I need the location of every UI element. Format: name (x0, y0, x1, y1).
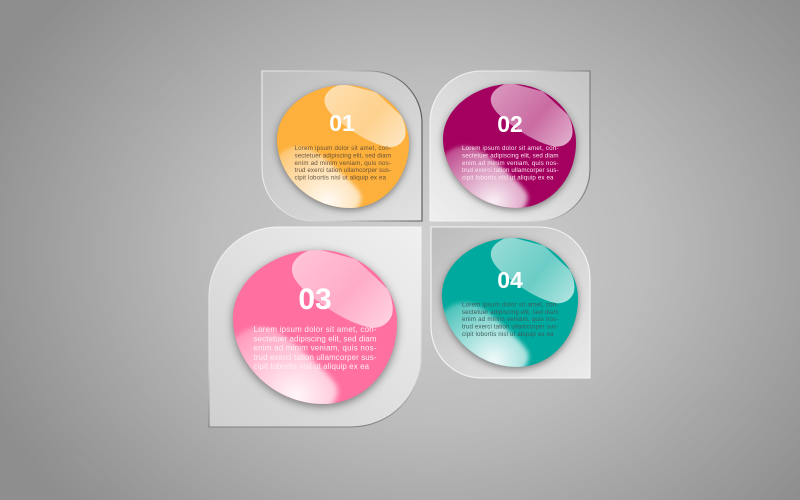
text block 2: enim ad minim veniam, quis nos- (462, 160, 558, 167)
text block 3: enim ad minim veniam, quis nos- (254, 344, 377, 353)
blob: teal (438, 237, 578, 371)
text block 4: cipit lobortis nisl ut aliquip ex ea (462, 331, 554, 338)
panel 1 (262, 71, 422, 221)
text block 2: trud exerci tation ullamcorper sus- (462, 167, 558, 174)
text block 2: cipit lobortis nisl ut aliquip ex ea (462, 175, 554, 182)
text block 3: Lorem ipsum dolor sit amet, con- (254, 325, 377, 334)
blob: pink (228, 248, 397, 409)
number 03: 03 (298, 283, 332, 316)
text block 1 (294, 145, 391, 182)
text block 4 (462, 301, 558, 338)
number 04: 04 (497, 267, 523, 293)
text block 4: trud exerci tation ullamcorper sus- (462, 324, 558, 331)
panel 3 (209, 227, 421, 427)
number 02: 02 (497, 111, 523, 137)
panel 2 (430, 71, 590, 221)
text block 3: sectetuer adipiscing elit, sed diam (254, 334, 377, 343)
text block 1: enim ad minim veniam, quis nos- (294, 160, 391, 167)
blob: magenta (439, 83, 576, 212)
text block 3 (254, 325, 377, 371)
text block 3: trud exerci tation ullamcorper sus- (254, 353, 377, 362)
text block 1: trud exerci tation ullamcorper sus- (294, 167, 391, 174)
number 01: 01 (329, 110, 355, 136)
text block 1: Lorem ipsum dolor sit amet, con- (294, 145, 391, 152)
blob: orange (273, 84, 409, 212)
text block 2 (462, 145, 558, 182)
text block 1: sectetuer adipiscing elit, sed diam (294, 152, 391, 159)
panel 4 (431, 227, 590, 378)
text block 2: Lorem ipsum dolor sit amet, con- (462, 145, 558, 152)
text block 3: cipit lobortis nisl ut aliquip ex ea (254, 362, 370, 371)
text block 2: sectetuer adipiscing elit, sed diam (462, 152, 558, 159)
text block 4: enim ad minim veniam, quis nos- (462, 316, 558, 323)
text block 4: sectetuer adipiscing elit, sed diam (462, 309, 558, 316)
text block 1: cipit lobortis nisl ut aliquip ex ea (294, 175, 387, 182)
text block 4: Lorem ipsum dolor sit amet, con- (462, 301, 558, 308)
